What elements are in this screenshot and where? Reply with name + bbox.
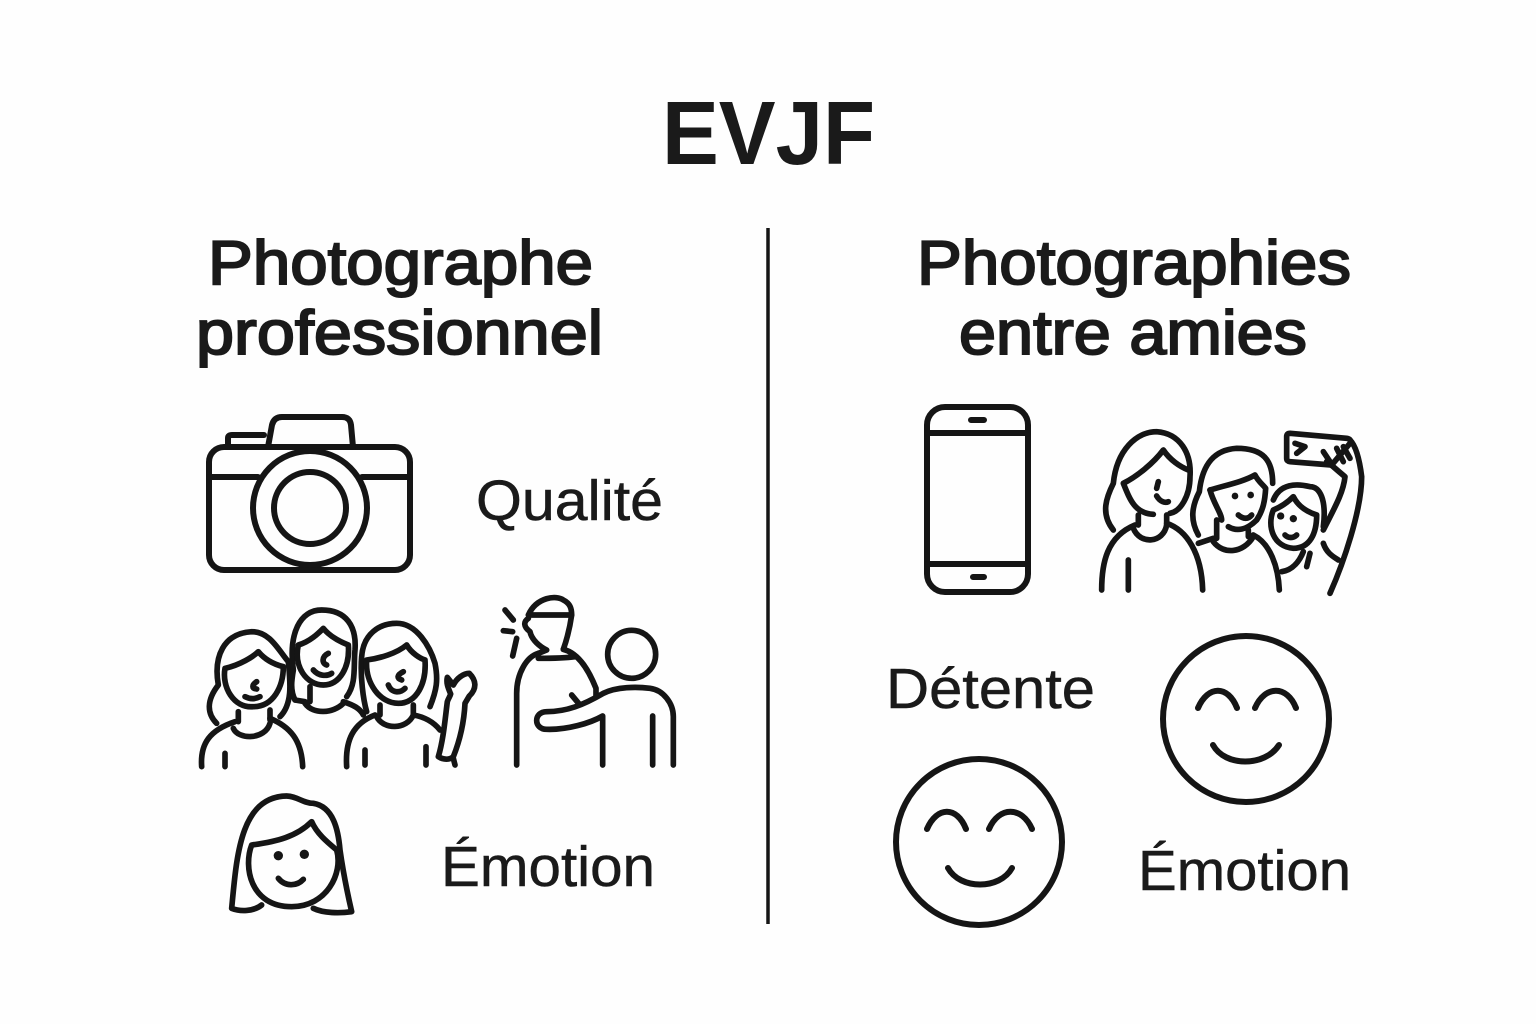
heading: left column xyxy=(196,229,603,368)
icon: smiley lower xyxy=(896,759,1062,925)
heading: right column: entre amies xyxy=(959,299,1307,368)
icon: camera xyxy=(209,417,410,570)
label: Émotion (right): Émotion xyxy=(1138,839,1351,903)
icon: woman portrait xyxy=(232,796,352,913)
icon: smiley upper xyxy=(1163,636,1329,802)
label: Détente: Détente xyxy=(886,657,1095,721)
label: Émotion (left): Émotion xyxy=(441,835,655,899)
icon: photographer and friend xyxy=(503,598,673,765)
icon: group of three women xyxy=(201,610,475,767)
title: EVJF xyxy=(662,84,875,184)
icon: friends taking selfie xyxy=(1102,432,1362,593)
heading: right column: Photographies xyxy=(917,229,1351,298)
heading: left column: professionnel xyxy=(196,299,603,368)
label: Qualité: Qualité xyxy=(476,469,663,533)
icon: phone xyxy=(927,407,1028,592)
divider xyxy=(766,228,770,924)
heading: left column: Photographe xyxy=(208,229,593,298)
heading: right column xyxy=(917,229,1351,368)
